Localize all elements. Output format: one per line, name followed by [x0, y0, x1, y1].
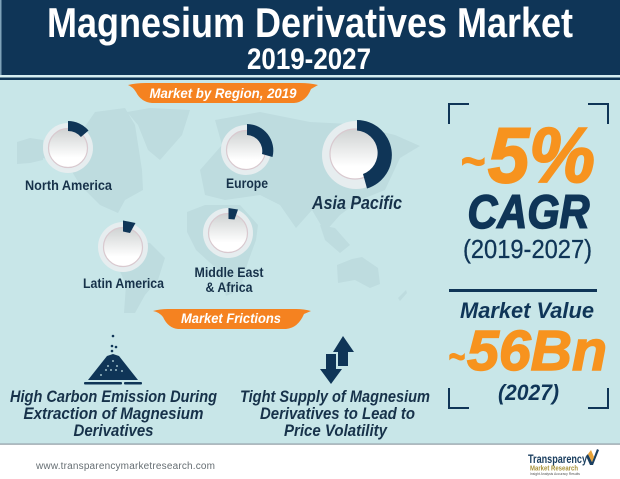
stat: market value amount: 56Bn	[467, 319, 607, 383]
label: europe: Europe	[226, 176, 268, 191]
icon: powder pile	[84, 335, 142, 384]
label: middle east and africa: & Africa	[206, 280, 253, 295]
label: asia pacific: Asia Pacific	[311, 193, 402, 213]
logo	[528, 449, 599, 476]
ribbon: market by region	[128, 83, 318, 103]
logo: Market Research	[530, 464, 578, 472]
stat: market value label: Market Value	[460, 298, 594, 323]
label: latin america: Latin America	[83, 276, 164, 291]
world map background	[17, 108, 420, 313]
ribbon: market frictions: Market Frictions	[181, 310, 281, 326]
stat: cagr label: CAGR	[468, 185, 590, 238]
stat: market value amount: ~	[448, 335, 465, 379]
donut: middle east and africa	[203, 208, 253, 258]
stat: cagr percentage: 5%	[488, 111, 595, 199]
footer	[0, 444, 620, 479]
title years: 2019-2027	[247, 43, 371, 76]
donut: asia pacific	[322, 120, 392, 189]
donut: europe	[221, 124, 273, 175]
ribbon: market frictions	[153, 309, 311, 329]
donut: north america	[43, 121, 93, 173]
label: middle east and africa: Middle East	[194, 265, 264, 280]
text: tight supply: Derivatives to Lead to	[260, 405, 415, 423]
donut: latin america	[98, 220, 148, 272]
website url: www.transparencymarketresearch.com	[35, 461, 215, 472]
text: tight supply: Price Volatility	[284, 422, 388, 440]
text: tight supply	[240, 388, 430, 440]
text: tight supply: Tight Supply of Magnesium	[240, 388, 430, 406]
text: carbon emission: Extraction of Magnesium	[24, 405, 204, 423]
corner brackets	[449, 104, 608, 408]
logo: Transparency	[528, 452, 587, 466]
text: carbon emission: High Carbon Emission During	[10, 388, 217, 406]
stat: cagr period: (2019-2027)	[463, 234, 592, 264]
stat: market value year: (2027)	[498, 380, 559, 405]
icon: up and down arrows	[320, 336, 354, 384]
ribbon: market by region: Market by Region, 2019	[150, 85, 297, 101]
text: carbon emission	[10, 388, 217, 440]
divider	[449, 289, 597, 292]
logo: Insight Analysis Accuracy Results	[530, 472, 580, 476]
text: carbon emission: Derivatives	[74, 422, 154, 440]
label: middle east and africa	[194, 265, 264, 295]
header banner	[0, 0, 620, 80]
label: north america: North America	[25, 178, 112, 193]
stat: cagr percentage: ~	[460, 133, 485, 189]
